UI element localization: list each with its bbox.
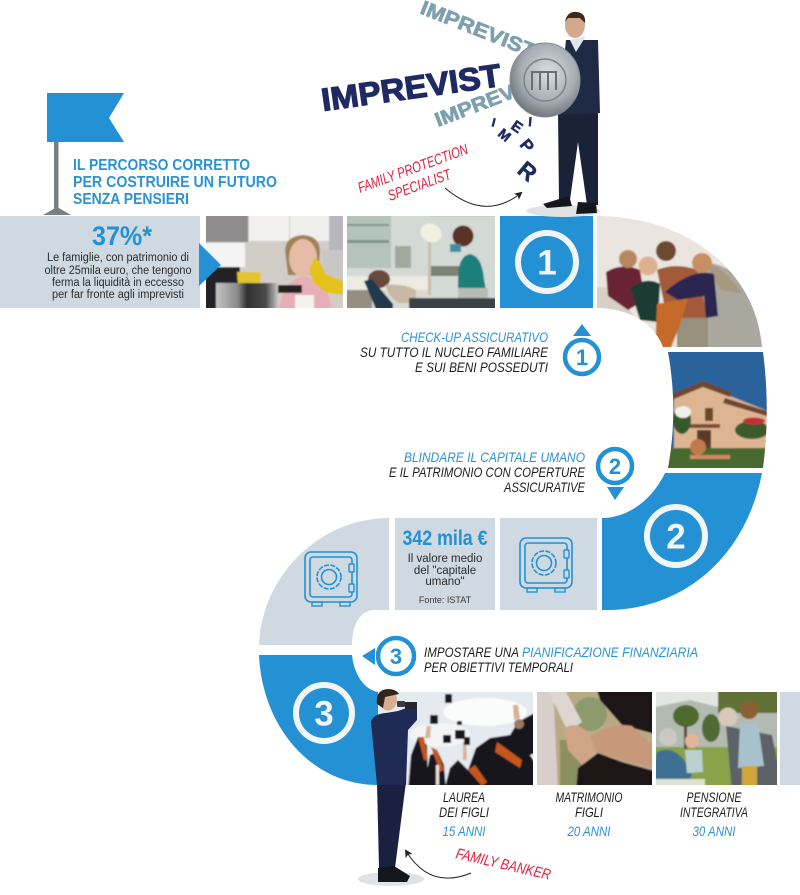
milestone: laurea (439, 789, 489, 839)
panel: 37% statistic (0, 216, 200, 308)
milestone: laurea: DEI FIGLI (439, 804, 489, 820)
label: family banker: FAMILY BANKER (454, 845, 553, 884)
photo: dentist (347, 216, 495, 308)
step 1 text: E SUI BENI POSSEDUTI (415, 359, 548, 375)
label: family protection specialist (356, 141, 470, 205)
description: del "capitale (414, 565, 476, 577)
milestone: matrimonio (556, 789, 623, 839)
number 3 badge: 3 (314, 694, 334, 734)
step 3 marker (362, 638, 414, 674)
source: Fonte: ISTAT (419, 595, 472, 605)
photo: country house (668, 352, 767, 468)
scattered letters: E (508, 117, 526, 137)
step 2 marker: 2 (609, 454, 621, 479)
milestone: matrimonio: 20 ANNI (567, 823, 611, 839)
play arrow (199, 243, 221, 286)
icon: flag (43, 93, 124, 215)
scattered word: IMPREVISTI main: IMPREVIST (319, 57, 504, 118)
value: 342 mila € (402, 527, 488, 550)
milestone: laurea: 15 ANNI (442, 823, 486, 839)
step 2 text: ASSICURATIVE (503, 479, 586, 495)
photo: grandparents (656, 692, 777, 785)
photo: family on the beach (597, 216, 762, 347)
photo: wedding ring (537, 692, 652, 785)
title: IL PERCORSO CORRETTO (73, 157, 250, 174)
arrow: to specialist (445, 188, 521, 206)
photo: graduation (378, 692, 533, 785)
photo: woman in flooded kitchen (206, 216, 343, 308)
description: Il valore medio (408, 553, 482, 565)
figure: family protection specialist with shield (510, 12, 600, 217)
scattered letters: I (490, 115, 497, 130)
panel: step 1 tile (500, 216, 593, 308)
milestone: matrimonio: MATRIMONIO (556, 789, 623, 805)
number 2 badge: 2 (666, 518, 686, 556)
panel: safe tile right (500, 518, 597, 610)
description: umano" (425, 576, 465, 588)
arrow: to banker (406, 851, 471, 878)
label: family protection specialist: SPECIALIST (386, 166, 455, 205)
figure: family banker with binoculars (358, 689, 424, 886)
scattered letters: P (516, 135, 538, 156)
number 1 badge: 1 (537, 244, 557, 282)
scattered letters: R (513, 156, 543, 187)
step 3 text: PIANIFICAZIONE FINANZIARIA (522, 644, 698, 660)
step 1 marker (565, 324, 599, 374)
title (73, 157, 277, 208)
panel: safe curved tile left (259, 518, 389, 645)
label: family protection specialist: FAMILY PROTECTION (356, 141, 470, 197)
icon: safe (305, 552, 357, 606)
step 1 text (360, 329, 549, 375)
step 2 text: BLINDARE IL CAPITALE UMANO (404, 449, 585, 465)
title: PER COSTRUIRE UN FUTURO (73, 174, 277, 191)
step 2 text (389, 449, 586, 495)
milestone: pensione: 30 ANNI (692, 823, 736, 839)
milestone: pensione (680, 789, 748, 839)
step 1 marker: 1 (576, 345, 588, 370)
description (408, 553, 482, 588)
scattered letters (490, 114, 543, 187)
step 2 marker (598, 449, 632, 500)
panel: right gray strip (780, 692, 800, 785)
step 3 marker: 3 (390, 644, 402, 669)
scattered word: IMPREVISTI lower: IMPREV (432, 81, 519, 132)
statistic description (44, 252, 192, 301)
statistic description: oltre 25mila euro, che tengono (44, 265, 192, 277)
number 2 badge (647, 507, 705, 565)
statistic description: per far fronte agli imprevisti (52, 289, 184, 301)
statistic value: 37%* (92, 221, 152, 251)
step 3 text: PER OBIETTIVI TEMPORALI (424, 659, 573, 675)
milestone: matrimonio: FIGLI (575, 804, 603, 820)
statistic description: ferma la liquidità in eccesso (52, 277, 184, 289)
icon: safe (520, 538, 572, 592)
scattered letters: M (495, 125, 514, 145)
scattered letters: I (528, 114, 533, 129)
statistic description: Le famiglie, con patrimonio di (47, 252, 189, 264)
panel: step 2 curved tile (602, 473, 762, 610)
step 1 text: CHECK-UP ASSICURATIVO (401, 329, 548, 345)
step 1 text: SU TUTTO IL NUCLEO FAMILIARE (360, 344, 549, 360)
title: SENZA PENSIERI (73, 191, 189, 208)
milestone: pensione: INTEGRATIVA (680, 804, 748, 820)
panel: step 3 curved tile (259, 655, 378, 785)
panel: human capital value (395, 518, 495, 610)
step 3 text: IMPOSTARE UNA (424, 644, 519, 660)
step 2 text: E IL PATRIMONIO CON COPERTURE (389, 464, 586, 480)
milestone: pensione: PENSIONE (686, 789, 742, 805)
milestone: laurea: LAUREA (443, 789, 485, 805)
icon: metal shield (510, 43, 580, 117)
step 3 text (424, 644, 698, 675)
